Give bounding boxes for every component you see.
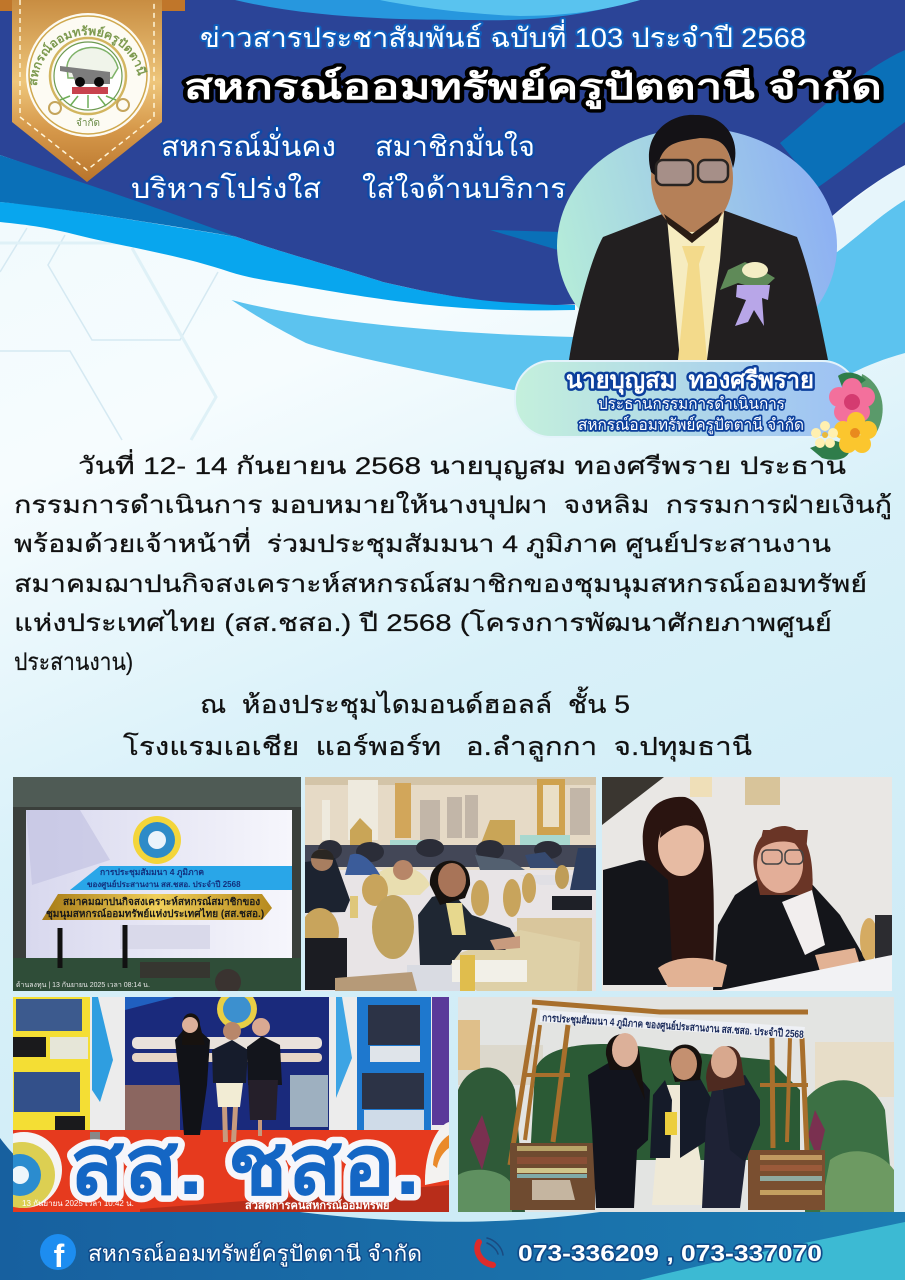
slogans: ใส่ใจด้านบริการ	[362, 172, 566, 204]
shirt	[667, 212, 724, 360]
newsletter issue heading: ข่าวสารประชาสัมพันธ์ ฉบับที่ 103 ประจำปี 2568	[200, 19, 806, 53]
cooperative name title: สหกรณ์ออมทรัพย์ครูปัตตานี จำกัด	[184, 66, 882, 110]
ribbon badge with cooperative seal	[0, 0, 185, 182]
photo: seminar stage screen: ด้านลงทุน | 13 กันยายน 2025 เวลา 08:14 น.	[16, 981, 150, 989]
main article text	[14, 449, 892, 676]
chairman position: ประธานกรรมการดำเนินการ	[598, 396, 785, 413]
photo: seminar stage screen: ของศูนย์ประสานงาน สส.ชสอ. ประจำปี 2568	[87, 879, 241, 890]
photo: group by bamboo swing	[458, 997, 894, 1212]
seal: จำกัด	[76, 118, 100, 129]
footer band	[0, 1138, 905, 1280]
venue text	[123, 686, 752, 762]
slogans: สมาชิกมั่นใจ	[375, 127, 535, 162]
venue text: ณ ห้องประชุมไดมอนด์ฮอลล์ ชั้น 5	[200, 686, 630, 720]
photo: seminar stage screen: ชุมนุมสหกรณ์ออมทรัพย์แห่งประเทศไทย (สส.ชสอ.)	[46, 907, 264, 920]
chairman name: นายบุญสม ทองศรีพราย	[566, 367, 814, 396]
main article text: ประสานงาน)	[14, 649, 133, 676]
glasses	[656, 160, 728, 185]
photo: group by bamboo swing: การประชุมสัมมนา 4 ภูมิภาค ของศูนย์ประสานงาน สส.ชสอ. ประจำปี 2568	[542, 1011, 804, 1042]
header wave background	[0, 0, 905, 390]
tie	[678, 246, 707, 360]
photo: booth with stage letters: สวัสดิการคนสหกรณ์ออมทรัพย์	[245, 1199, 389, 1212]
slogans	[131, 127, 566, 204]
corsage	[720, 262, 775, 326]
main article text: สมาคมฌาปนกิจสงเคราะห์สหกรณ์สมาชิกของชุมนุมสหกรณ์ออมทรัพย์	[14, 570, 867, 599]
main article text: พร้อมด้วยเจ้าหน้าที่ ร่วมประชุมสัมมนา 4 ภูมิภาค ศูนย์ประสานงาน	[14, 527, 831, 559]
icon: flowers	[810, 373, 883, 460]
portrait of chairman	[557, 115, 837, 364]
facebook page name: สหกรณ์ออมทรัพย์ครูปัตตานี จำกัด	[88, 1241, 422, 1267]
seal: สหกรณ์ออมทรัพย์ครูปัตตานี	[30, 25, 148, 86]
icon: facebook: f	[54, 1238, 65, 1274]
venue text: โรงแรมเอเชีย แอร์พอร์ท อ.ลำลูกกา จ.ปทุมธานี	[123, 732, 752, 762]
suit	[569, 210, 828, 360]
name plate	[515, 361, 858, 437]
photo: booth with stage letters: 13 กันยายน 2025 เวลา 10:42 น.	[22, 1199, 134, 1208]
main article text: แห่งประเทศไทย (สส.ชสอ.) ปี 2568 (โครงการพัฒนาศักยภาพศูนย์	[14, 609, 832, 638]
head	[651, 124, 733, 232]
photo: booth with stage letters	[13, 997, 449, 1212]
main article text: วันที่ 12- 14 กันยายน 2568 นายบุญสม ทองศรีพราย ประธาน	[78, 449, 846, 481]
photo: attendees in conference room	[305, 777, 596, 991]
name plate: สหกรณ์ออมทรัพย์ครูปัตตานี จำกัด	[578, 415, 804, 435]
stage letters: สส. ชสอ.	[70, 1118, 420, 1212]
slogans: บริหารโปร่งใส	[131, 172, 321, 204]
slogans: สหกรณ์มั่นคง	[161, 127, 336, 162]
icon: phone	[477, 1238, 503, 1265]
icon: facebook	[40, 1234, 76, 1274]
seal	[26, 13, 150, 137]
photo: seminar stage screen	[13, 777, 301, 991]
decorative hexagons	[0, 228, 218, 440]
phone numbers: 073-336209 , 073-337070	[518, 1240, 822, 1266]
photo: seminar stage screen: การประชุมสัมมนา 4 ภูมิภาค	[100, 867, 204, 878]
main article text: กรรมการดำเนินการ มอบหมายให้นางบุปผา จงหลิม กรรมการฝ่ายเงินกู้	[14, 491, 892, 520]
photo: seminar stage screen: สมาคมฌาปนกิจสงเคราะห์สหกรณ์สมาชิกของ	[63, 896, 260, 908]
photo: two women at seminar table	[602, 777, 892, 991]
